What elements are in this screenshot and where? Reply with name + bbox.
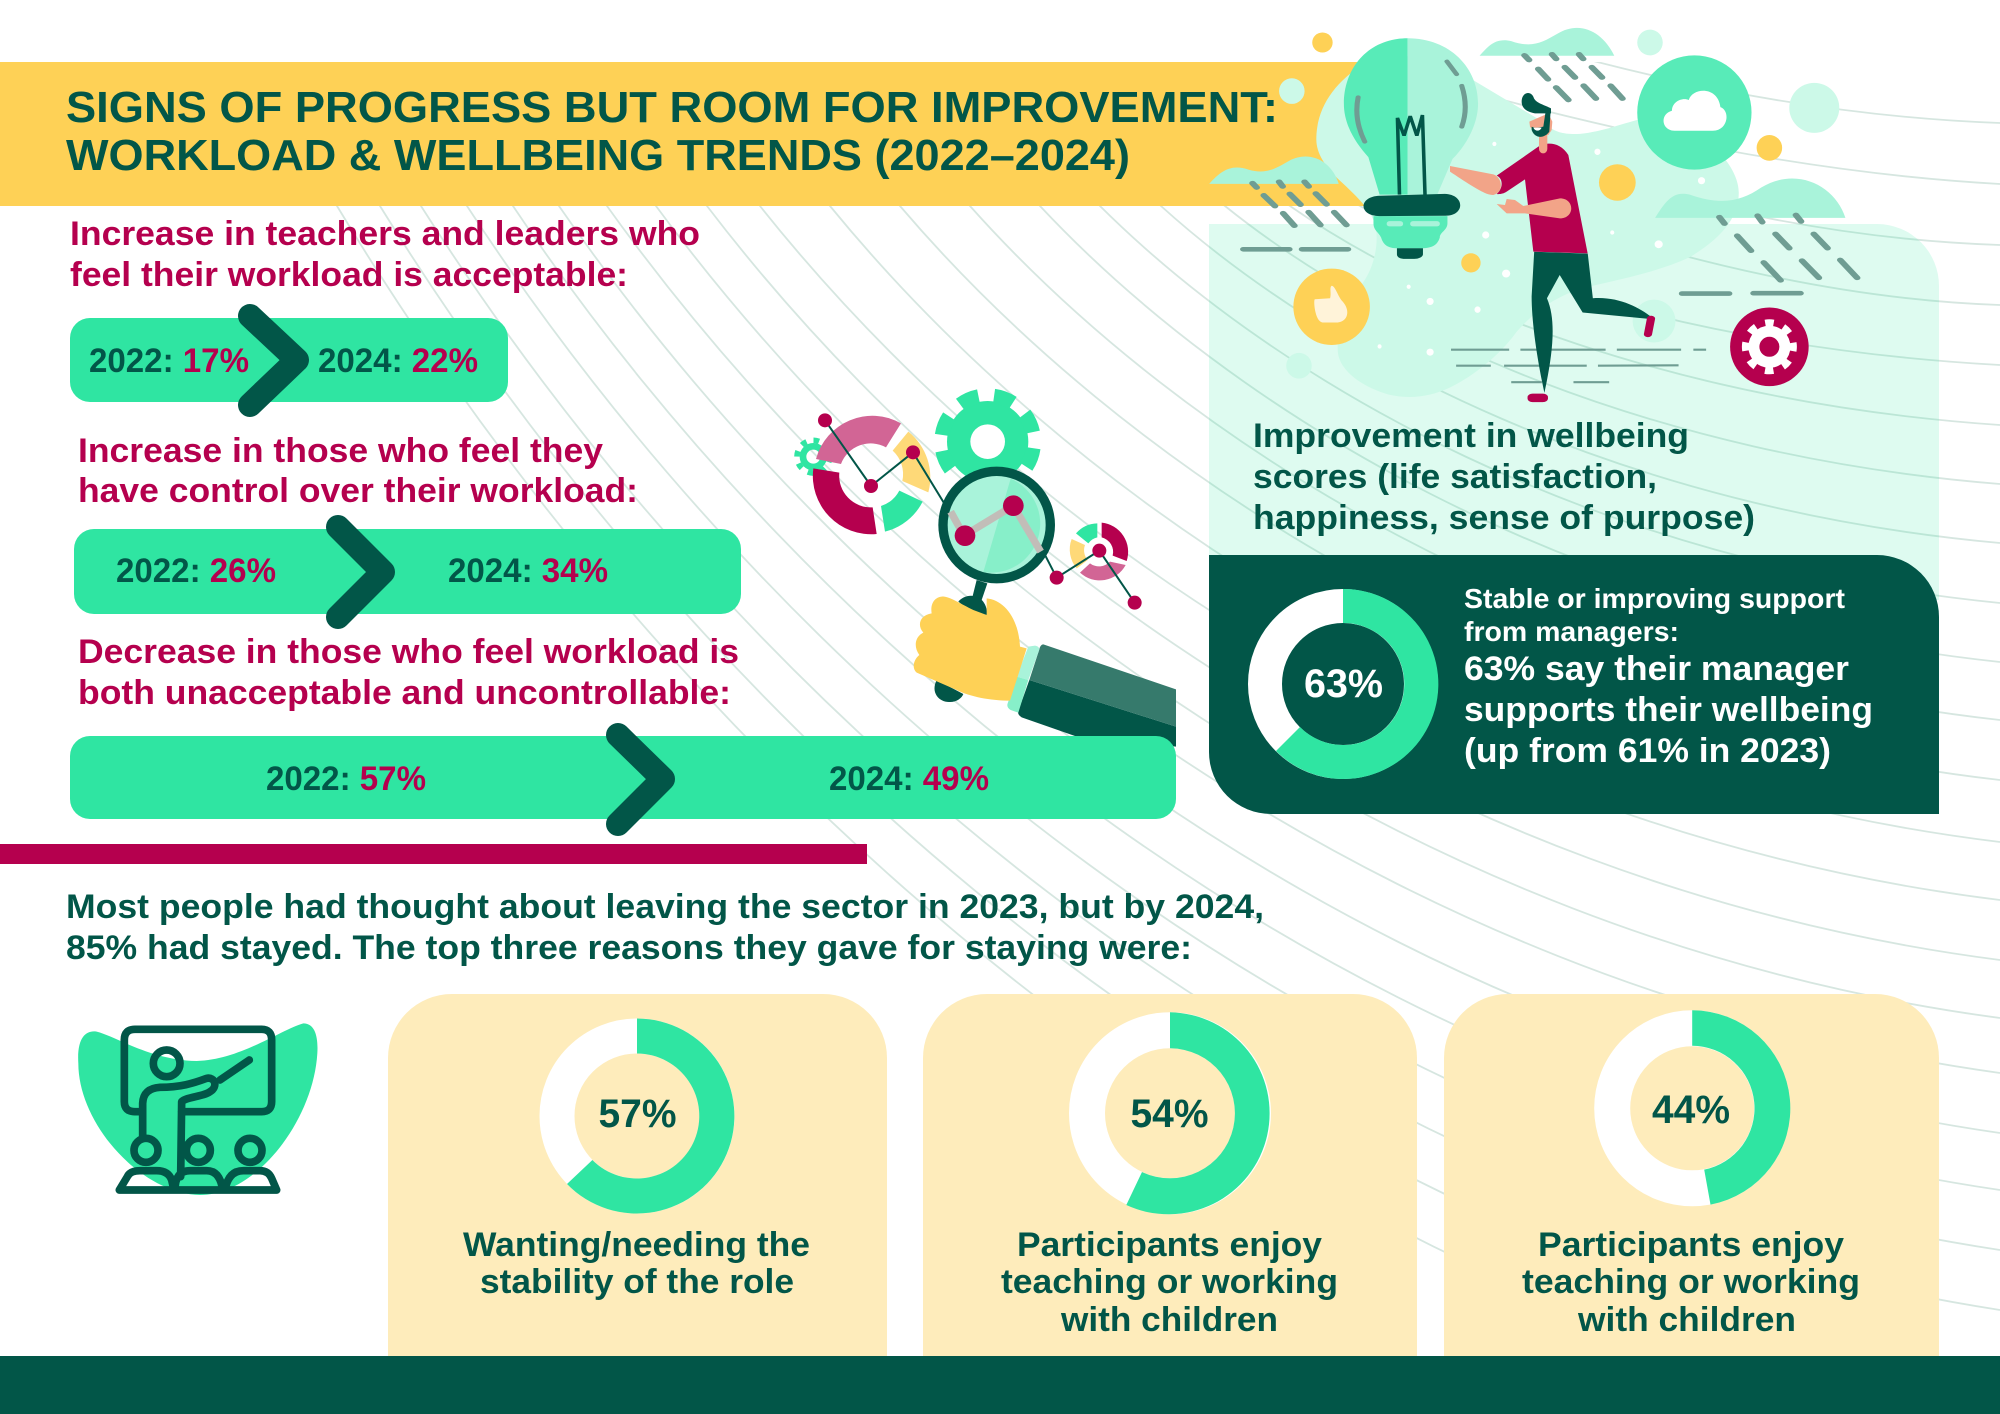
- lens: [938, 467, 1055, 583]
- yellow dots: [1312, 32, 1782, 272]
- panel: manager support: [1209, 555, 1939, 814]
- title: WORKLOAD & WELLBEING TRENDS (2022–2024): [66, 132, 1130, 180]
- manager support text: from managers:: [1464, 616, 1679, 647]
- line chart: [818, 413, 1142, 610]
- small gear: [797, 440, 830, 473]
- label: with children: [1577, 1301, 1796, 1339]
- label: [463, 1226, 810, 1301]
- legs: [1528, 252, 1652, 402]
- wellbeing text: happiness, sense of purpose): [1253, 499, 1755, 537]
- heading: have control over their workload:: [78, 472, 638, 510]
- blob backdrop: [1316, 56, 1739, 397]
- wellbeing text: [1253, 417, 1755, 537]
- manager support text: Stable or improving support: [1464, 583, 1845, 614]
- card: stability: [388, 994, 887, 1360]
- illustration: magnifying glass over charts: [797, 390, 1176, 747]
- comparison bar: [74, 527, 741, 617]
- donut chart: 54%: [1087, 1012, 1270, 1214]
- section intro text: Most people had thought about leaving the sector in 2023, but by 2024,: [66, 888, 1264, 926]
- manager support text: (up from 61% in 2023): [1464, 732, 1831, 770]
- manager support text: supports their wellbeing: [1464, 691, 1873, 729]
- heading: feel their workload is acceptable:: [70, 256, 628, 294]
- card: enjoy teaching 54%: [923, 994, 1417, 1360]
- man figure: [1450, 93, 1652, 402]
- donut chart: 63%: [1265, 589, 1438, 779]
- comparison bar: 2022: 26%: [116, 552, 276, 590]
- comparison bar: 2022: 57%: [266, 760, 426, 798]
- stat 2: [74, 432, 741, 617]
- heading: both unacceptable and uncontrollable:: [78, 674, 731, 712]
- label: [1522, 1226, 1860, 1339]
- label: with children: [1060, 1301, 1278, 1339]
- title banner: [0, 62, 1368, 206]
- icon: teacher presenting: [78, 1023, 317, 1195]
- donut chart: 44%: 44%: [1652, 1088, 1730, 1132]
- small donut: [1070, 523, 1128, 580]
- comparison bar: [70, 316, 508, 405]
- footer band: [0, 1356, 2000, 1414]
- label: teaching or working: [1522, 1263, 1860, 1301]
- donut chart: 57%: [557, 1018, 734, 1213]
- hand: [914, 596, 1027, 701]
- heading: Increase in those who feel they: [78, 432, 603, 470]
- label: Participants enjoy: [1017, 1226, 1322, 1264]
- comparison bar: [70, 735, 1176, 824]
- label: Wanting/needing the: [463, 1226, 810, 1264]
- manager support text: 63% say their manager: [1464, 650, 1849, 688]
- icon: cloud badge: [1637, 55, 1752, 170]
- comparison bar: 2022: 17%: [89, 342, 249, 380]
- section intro text: 85% had stayed. The top three reasons they gave for staying were:: [66, 929, 1192, 967]
- section intro text: [66, 888, 1264, 967]
- label: stability of the role: [480, 1263, 794, 1301]
- clouds: [1209, 28, 1845, 218]
- manager support text: [1464, 583, 1873, 770]
- illustration: man with light bulb: [1209, 28, 1857, 402]
- stat 3: [70, 633, 1176, 824]
- heading: Increase in teachers and leaders who: [70, 215, 700, 253]
- cuff: [1007, 646, 1039, 713]
- large donut: [813, 416, 930, 534]
- icon: thumbs up badge: [1293, 269, 1370, 345]
- pale dots: [1279, 30, 1839, 379]
- divider bar: [0, 844, 867, 864]
- comparison bar: 2024: 49%: [829, 760, 989, 798]
- stat 1: [70, 215, 700, 405]
- label: teaching or working: [1001, 1263, 1338, 1301]
- title: SIGNS OF PROGRESS BUT ROOM FOR IMPROVEMENT:: [66, 84, 1278, 132]
- comparison bar: 2024: 22%: [318, 342, 478, 380]
- donut chart: 57%: 57%: [598, 1092, 676, 1136]
- icon: gear badge: [1730, 307, 1809, 386]
- wellbeing text: scores (life satisfaction,: [1253, 458, 1657, 496]
- donut chart: 54%: 54%: [1130, 1092, 1208, 1136]
- heading: [70, 215, 700, 294]
- heading: Decrease in those who feel workload is: [78, 633, 739, 671]
- heading: [78, 432, 638, 510]
- card: enjoy teaching 44%: [1444, 994, 1939, 1360]
- light bulb: [1344, 38, 1478, 259]
- label: [1001, 1226, 1338, 1339]
- sleeve: [1018, 644, 1176, 747]
- rain and speed dashes: [1243, 54, 1857, 382]
- comparison bar: 2024: 34%: [448, 552, 608, 590]
- panel: wellbeing background: [1209, 224, 1939, 600]
- handle knobs: [935, 580, 987, 702]
- title: [66, 84, 1278, 180]
- heading: [78, 633, 739, 712]
- donut chart: 63%: 63%: [1304, 662, 1383, 706]
- donut chart: 44%: [1612, 1010, 1790, 1205]
- label: Participants enjoy: [1538, 1226, 1844, 1264]
- big gear: [936, 390, 1040, 494]
- torso and head: [1450, 93, 1588, 253]
- wellbeing text: Improvement in wellbeing: [1253, 417, 1689, 455]
- white sparkles: [1378, 142, 1705, 356]
